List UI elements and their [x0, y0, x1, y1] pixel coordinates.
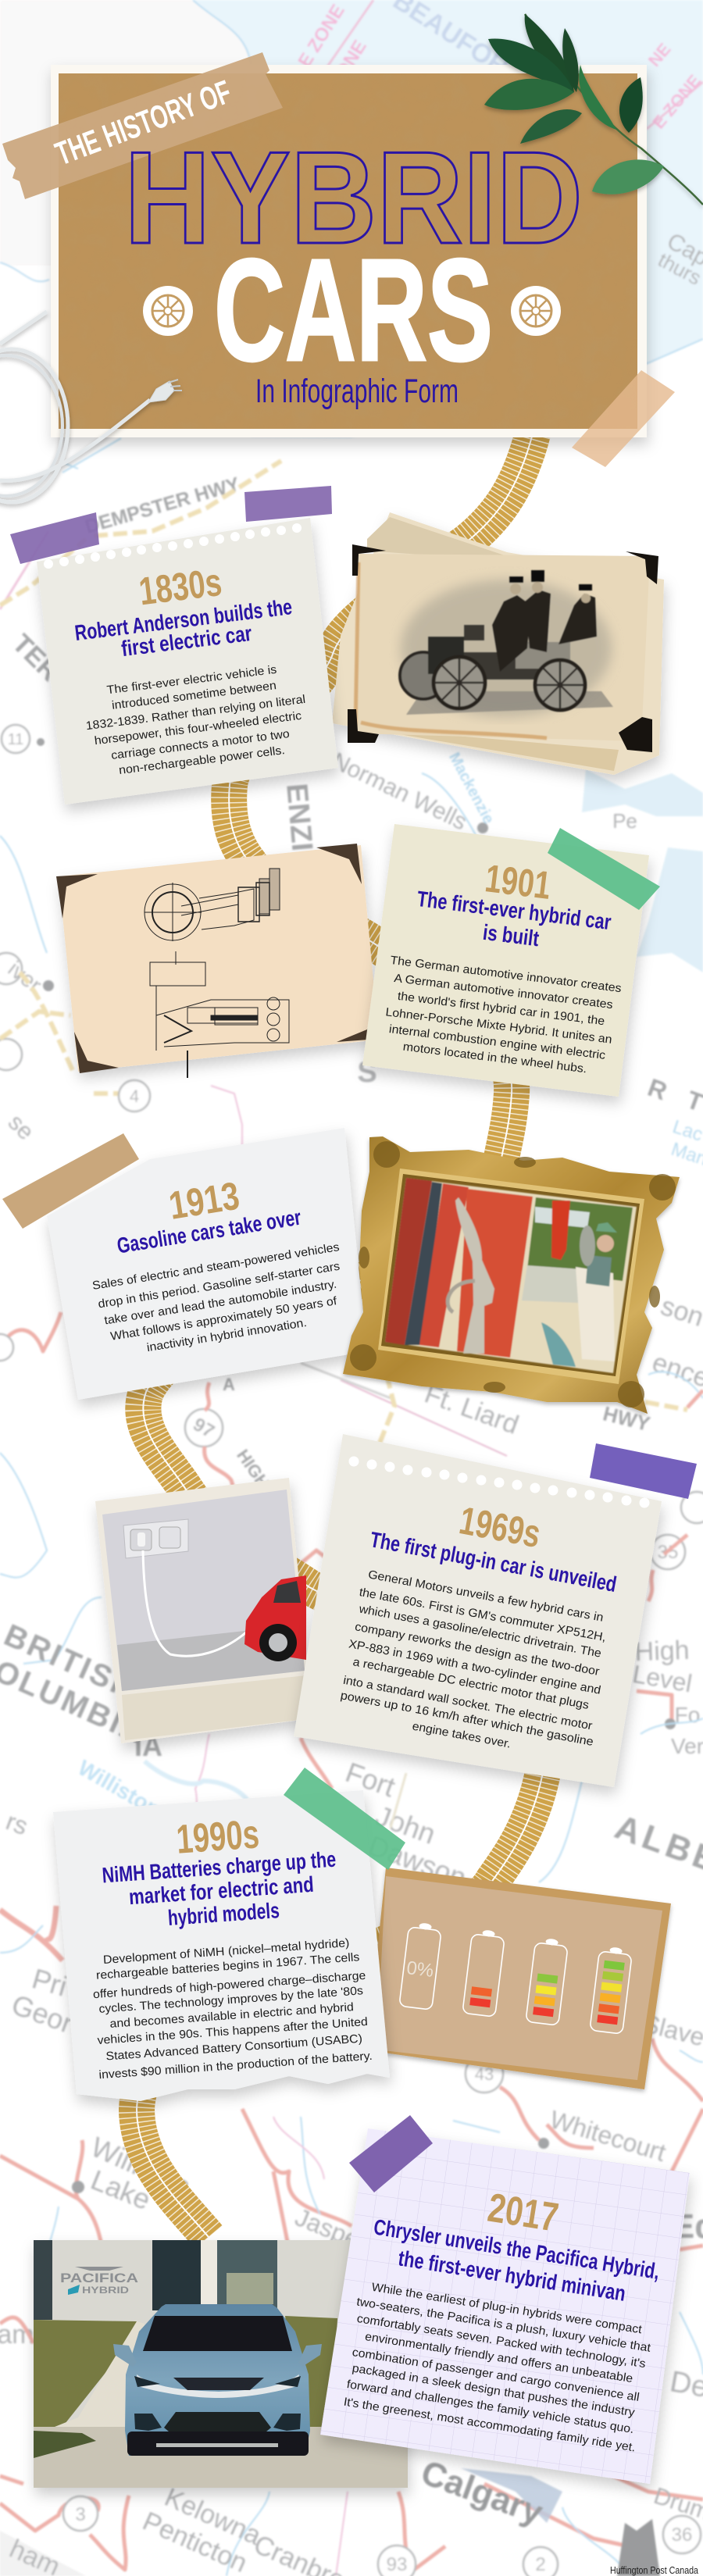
background map: HIGH	[233, 1446, 273, 1492]
battery: medium	[526, 1937, 569, 2025]
background map: se	[3, 1109, 39, 1145]
background map: Williams	[87, 2131, 195, 2203]
paper punch holes	[44, 523, 302, 569]
background map: High	[634, 1636, 690, 1667]
body text	[85, 663, 306, 777]
body text: forward and challenges the family vehicle status quo.	[346, 2378, 635, 2436]
icon: left wheel	[143, 286, 193, 336]
body text: Lohner-Porsche Mixte Hybrid. It unites an	[385, 1005, 612, 1047]
year: 1830s	[137, 560, 224, 613]
body text: comfortably seats seven. Packed with technology, it's	[356, 2312, 647, 2371]
heading: the first-ever hybrid minivan	[397, 2246, 627, 2306]
background map: Dawson	[364, 1829, 470, 1894]
panel: 1913	[2, 1128, 367, 1400]
panel: 2017	[320, 2115, 690, 2484]
background map: Lake	[87, 2164, 155, 2216]
framed photo	[385, 1178, 637, 1373]
panel: batteries	[367, 1868, 671, 2089]
background map: 43	[475, 2064, 494, 2084]
background map: Jasper	[291, 2203, 372, 2257]
background map: E ZONE	[294, 1, 349, 71]
tape: tan	[2, 1133, 139, 1229]
body text: introduced sometime between	[111, 679, 277, 712]
body text: and becomes available in electric and hybrid	[109, 2000, 354, 2031]
subtitle: In Infographic Form	[255, 373, 459, 410]
background map: Williston	[74, 1755, 165, 1821]
stack of old photos	[332, 512, 664, 775]
body text: What follows is approximately 50 years of	[109, 1294, 338, 1343]
engine drawing	[145, 869, 289, 1078]
body text: which uses a gasoline/electric drivetrain. The	[357, 1602, 602, 1661]
background map: TER	[6, 629, 65, 687]
heading	[102, 1847, 337, 1930]
heading: Gasoline cars take over	[116, 1205, 303, 1258]
body text: States Advanced Battery Consortium (USABC)	[105, 2032, 362, 2063]
battery: empty: 0%	[405, 1957, 435, 1982]
body text: powers up to 16 km/h after which the gasoline	[340, 1689, 594, 1749]
battery: full	[590, 1946, 633, 2034]
stairs	[55, 2321, 145, 2427]
photo: vintage electric car	[332, 512, 664, 775]
body text: a rechargeable DC electric motor that plugs	[352, 1655, 590, 1712]
ground	[34, 2427, 408, 2488]
body text: rechargeable batteries begins in 1967. The cells	[96, 1950, 360, 1982]
background map: Calgary	[416, 2453, 548, 2532]
background map: R	[644, 1073, 671, 1106]
heading	[73, 594, 294, 661]
body text: inactivity in hybrid innovation.	[146, 1316, 308, 1354]
heading: The first-ever hybrid car	[416, 887, 612, 934]
year: 1990s	[175, 1811, 261, 1863]
panel: title card	[2, 52, 647, 437]
background map: BRITISH	[0, 1618, 142, 1707]
body text: two-seaters, the Pacifica is a plush, luxury vehicle that	[355, 2295, 652, 2355]
battery: empty	[399, 1921, 442, 2010]
year: 1969s	[456, 1498, 544, 1556]
paper punch holes	[348, 1456, 650, 1507]
heading: hybrid models	[167, 1898, 280, 1930]
wall socket	[123, 1519, 188, 1558]
background map: ONE	[331, 37, 371, 82]
body text	[91, 1240, 341, 1354]
pacifica logo: HYBRID	[82, 2285, 129, 2296]
photo corners	[348, 544, 658, 752]
background map: Ver	[671, 1734, 703, 1758]
panel: 1990s	[53, 1790, 390, 2101]
background map: Norman Wells	[328, 747, 471, 835]
body text: While the earliest of plug-in hybrids were compact	[371, 2281, 644, 2336]
tape: purple	[590, 1443, 697, 1499]
background map: Fo	[675, 1703, 700, 1727]
heading: hybrid: HYBRID	[124, 124, 583, 271]
photo corners	[56, 844, 379, 1073]
heading	[416, 887, 612, 951]
tape: purple	[349, 2115, 433, 2192]
body text: combination of passenger and cargo convenience all	[352, 2346, 641, 2404]
background map: Whitecourt	[547, 2105, 669, 2167]
background map: 97	[189, 1414, 218, 1443]
tape: title bottom right	[572, 370, 675, 467]
body text: 1832-1839. Rather than relying on literal	[85, 693, 306, 733]
frame inner bevel	[378, 1168, 644, 1384]
background map: Kelowna	[160, 2482, 266, 2551]
photo: plug-in car polaroid	[95, 1478, 312, 1743]
body text: company reworks the design as the two-door	[354, 1620, 601, 1679]
body text	[385, 954, 622, 1076]
tape: green 1990s	[284, 1768, 405, 1870]
heading: is built	[482, 920, 541, 951]
body text	[343, 2281, 652, 2455]
year: 1913	[166, 1174, 242, 1228]
background map: 35	[658, 1542, 678, 1563]
background map: Fort	[341, 1756, 399, 1803]
body text: internal combustion engine with electric	[388, 1022, 607, 1062]
background map: NE	[644, 39, 675, 70]
panel: 1901	[362, 824, 660, 1097]
van	[113, 2304, 322, 2456]
body text	[340, 1568, 607, 1751]
body text	[93, 1936, 373, 2082]
photo: Chrysler Pacifica Hybrid	[34, 2240, 408, 2488]
pacifica logo: PACIFICA	[60, 2271, 138, 2285]
body text: drop in this period. Gasoline self-starter cars	[97, 1260, 341, 1311]
body text: The German automotive innovator creates	[390, 954, 622, 995]
label: the history of: THE HISTORY OF	[51, 73, 236, 172]
background map: 11	[8, 731, 23, 748]
heading: first electric car	[120, 621, 253, 661]
tape: green	[548, 828, 660, 910]
background map: Level	[630, 1660, 694, 1698]
tape: purple right	[244, 486, 332, 522]
body text: General Motors unveils a few hybrid cars in	[367, 1568, 605, 1625]
pacifica logo	[60, 2267, 138, 2296]
background map: IA	[134, 1730, 162, 1762]
icon: power cord	[0, 312, 182, 502]
heading: cars: CARS	[214, 230, 493, 391]
background map: Pri	[29, 1962, 70, 2003]
body text: the world's first hybrid car in 1901, the	[397, 990, 605, 1028]
body text: Sales of electric and steam-powered vehicles	[91, 1240, 341, 1293]
tape: title ribbon	[2, 52, 283, 199]
panel: 1830s	[10, 486, 338, 805]
body text: The first-ever electric vehicle is	[106, 663, 277, 697]
heading: Robert Anderson builds the	[73, 594, 294, 645]
battery: low	[462, 1928, 505, 2017]
heading: market for electric and	[128, 1872, 315, 1909]
icon: leaf branch	[484, 14, 703, 205]
body text: invests $90 million in the production of the battery.	[98, 2050, 373, 2082]
body text: into a standard wall socket. The electric motor	[342, 1674, 594, 1732]
body text: horsepower, this four-wheeled electric	[94, 709, 303, 747]
background map: Geor	[8, 1988, 77, 2039]
background map: HWY	[601, 1401, 652, 1436]
body text: It's the greenest, most accommodating family ride yet.	[343, 2396, 637, 2455]
body text: vehicles in the 90s. This happens after the United	[97, 2015, 368, 2047]
background map: 36	[672, 2524, 692, 2546]
background map: Pe	[612, 809, 637, 833]
panel: 1969s	[294, 1434, 697, 1787]
background map: Ft. Liard	[421, 1379, 523, 1440]
body text: non-rechargeable power cells.	[118, 744, 286, 777]
background map: DEMPSTER HWY	[83, 473, 242, 538]
body text: environmentally friendly and offers an unbeatable	[364, 2330, 633, 2385]
body text: the late 60s. First is GM's commuter XP512H,	[358, 1586, 607, 1644]
background map: 2	[535, 2554, 546, 2575]
charging cable	[143, 1550, 246, 1656]
year: 2017	[485, 2185, 562, 2241]
body text: take over and lead the automobile industry.	[103, 1278, 337, 1327]
heading: NiMH Batteries charge up the	[102, 1847, 337, 1887]
body text: offer hundreds of high-powered charge–discharge	[93, 1969, 366, 2001]
body text: cycles. The technology improves by the late '80s	[98, 1984, 363, 2016]
heading: The first plug-in car is unveiled	[369, 1527, 619, 1597]
background map: 93	[387, 2554, 407, 2575]
body text: Development of NiMH (nickel–metal hydride)	[102, 1936, 350, 1967]
photo: gilded frame with gas pump	[343, 1136, 680, 1414]
year: 1901	[483, 856, 553, 908]
photo: engine sketch	[56, 844, 379, 1078]
body text: engine takes over.	[411, 1720, 512, 1751]
background map: S	[357, 1056, 377, 1089]
body text: XP-883 in 1969 with a two-cylinder engine and	[348, 1637, 602, 1697]
car engraving	[400, 570, 613, 717]
background map: Mackenzie	[445, 750, 497, 827]
background map: 4	[130, 1086, 139, 1106]
icon: right wheel	[511, 286, 561, 336]
background map: A	[223, 1375, 235, 1394]
red car	[244, 1575, 306, 1661]
tape: purple left	[10, 512, 99, 564]
tire track	[137, 433, 544, 2237]
background map: iver	[4, 956, 46, 997]
body text: motors located in the wheel hubs.	[402, 1040, 587, 1076]
grass	[34, 2320, 137, 2427]
background map: rs	[2, 1807, 31, 1840]
background map: ENZIE	[280, 782, 320, 872]
body text: A German automotive innovator creates	[394, 972, 614, 1011]
body text: carriage connects a motor to two	[110, 727, 291, 762]
background map: 3	[75, 2504, 86, 2525]
background map: John	[372, 1800, 440, 1850]
body text: packaged in a sleek design that pushes the industry	[352, 2362, 636, 2420]
frame ornaments	[350, 1141, 676, 1408]
